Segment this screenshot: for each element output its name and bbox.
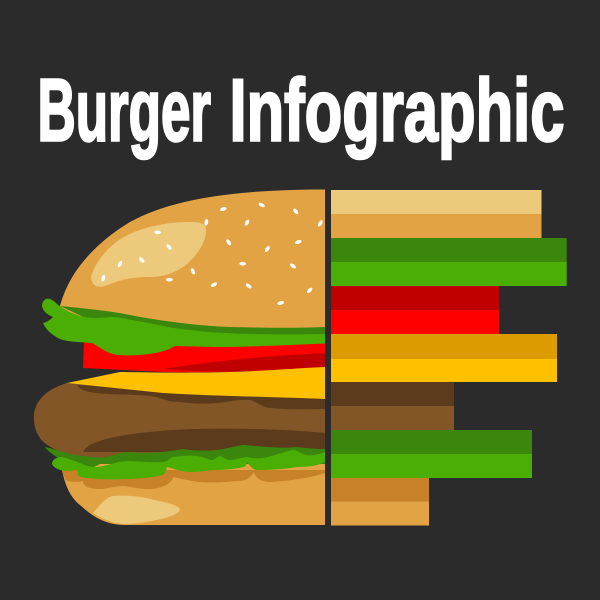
stacked bar chart of burger layers	[331, 190, 567, 526]
illustrated half burger	[34, 189, 331, 526]
center divider	[325, 189, 331, 526]
bar: lower lettuce	[331, 430, 532, 478]
patty	[34, 383, 325, 458]
bun shadow	[62, 470, 325, 489]
bun highlight	[93, 496, 180, 524]
bar: bottom bun	[331, 478, 429, 526]
title: Burger	[38, 60, 211, 160]
sesame seeds	[101, 202, 324, 306]
bar: upper lettuce	[331, 238, 567, 286]
bottom bun	[62, 460, 325, 525]
lower lettuce	[45, 445, 325, 479]
title	[38, 60, 564, 160]
patty bottom shadow	[83, 429, 325, 455]
cheese	[67, 367, 325, 399]
bun highlight	[91, 222, 206, 287]
top bun	[60, 190, 325, 335]
bar: top bun	[331, 190, 542, 238]
bar: patty	[331, 382, 454, 430]
bar: cheese	[331, 334, 557, 382]
bar: tomato	[331, 286, 499, 334]
upper lettuce	[42, 299, 325, 355]
tomato	[83, 340, 325, 372]
patty top shadow	[77, 385, 325, 409]
